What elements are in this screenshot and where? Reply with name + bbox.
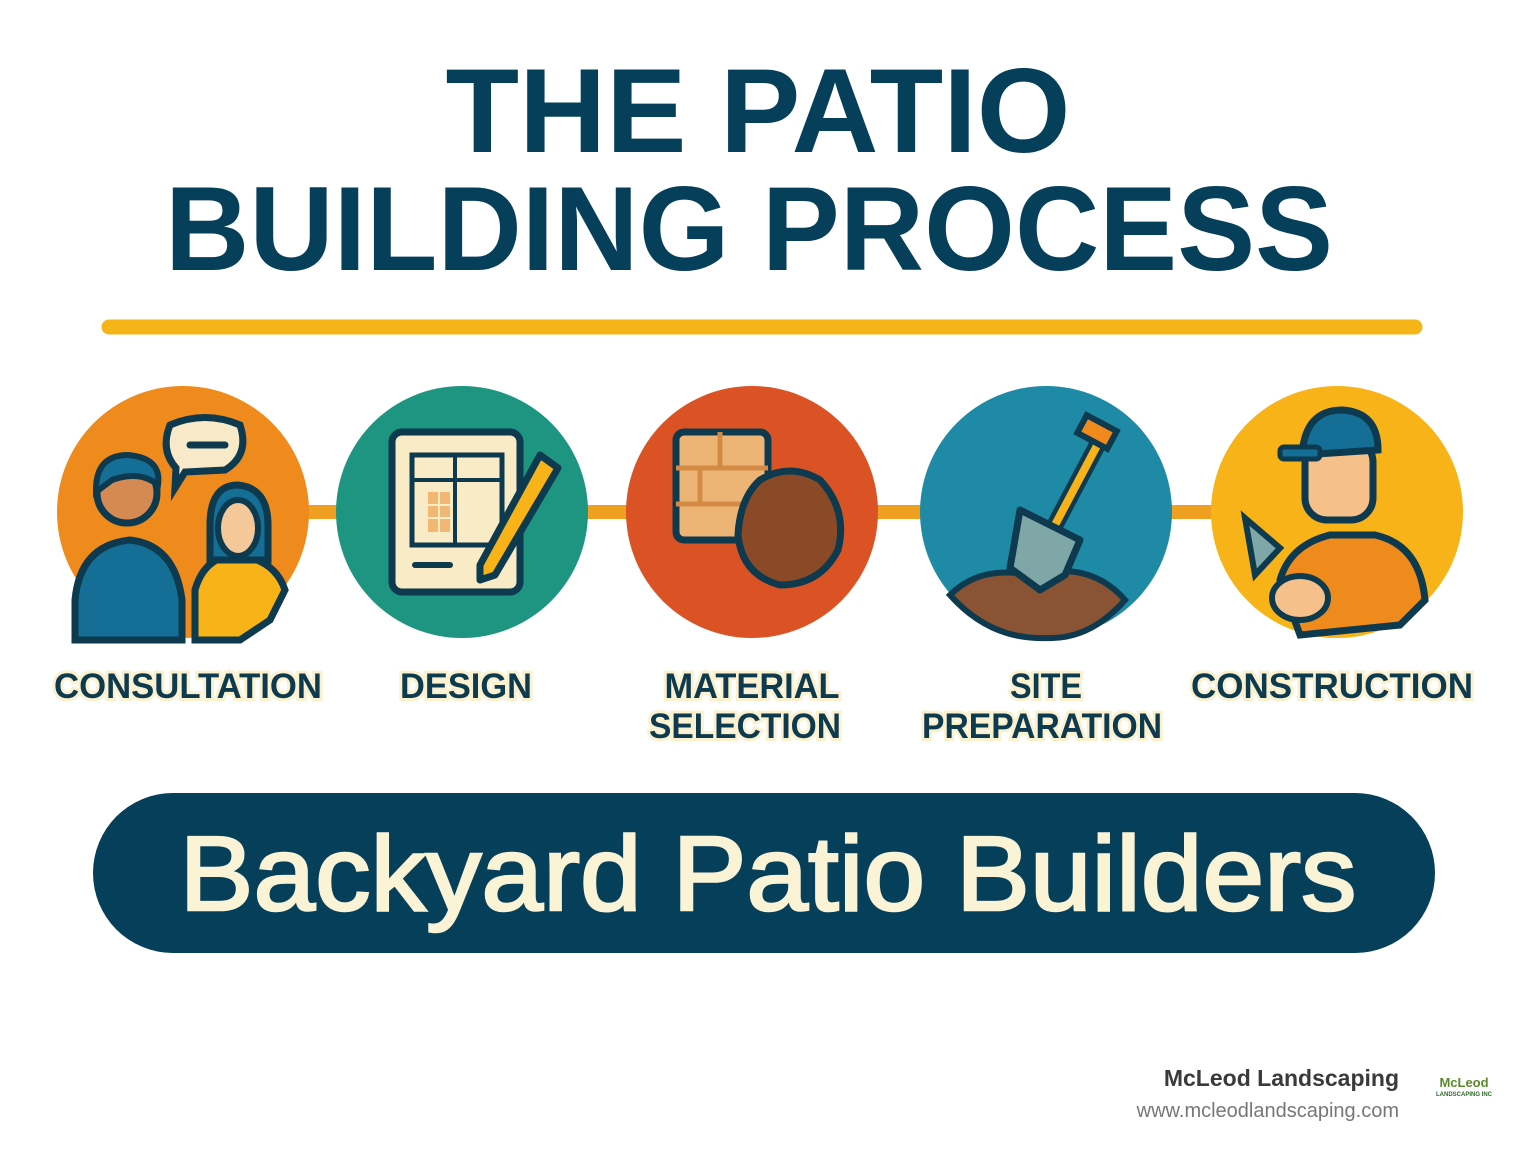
banner — [93, 793, 1435, 953]
step 5: construction icon — [1211, 386, 1463, 638]
labels: MATERIAL — [664, 667, 840, 706]
footer: company: www.mcleodlandscaping.com — [1136, 1100, 1399, 1122]
divider line — [109, 320, 1415, 334]
step 4: site preparation icon — [920, 386, 1172, 638]
title — [165, 44, 1333, 296]
labels: PREPARATION — [922, 707, 1162, 746]
footer: company: McLeod Landscaping — [1164, 1065, 1399, 1091]
logo — [1436, 1075, 1493, 1098]
labels — [54, 667, 1473, 746]
title: THE PATIO — [446, 44, 1070, 178]
labels: CONSTRUCTION — [1191, 667, 1473, 706]
labels: SITE — [1010, 667, 1082, 706]
footer: company — [1136, 1065, 1399, 1122]
step 3: material selection icon — [626, 386, 878, 638]
step 1: consultation icon — [57, 386, 309, 640]
connector line — [183, 505, 1337, 519]
labels: DESIGN — [400, 667, 532, 706]
banner: Backyard Patio Builders — [180, 815, 1356, 933]
labels: SELECTION — [649, 707, 841, 746]
logo: McLeod — [1439, 1075, 1489, 1090]
title: BUILDING PROCESS — [165, 162, 1333, 296]
logo: LANDSCAPING INC — [1436, 1092, 1493, 1098]
labels: CONSULTATION — [54, 667, 322, 706]
step 2: design icon — [336, 386, 588, 638]
